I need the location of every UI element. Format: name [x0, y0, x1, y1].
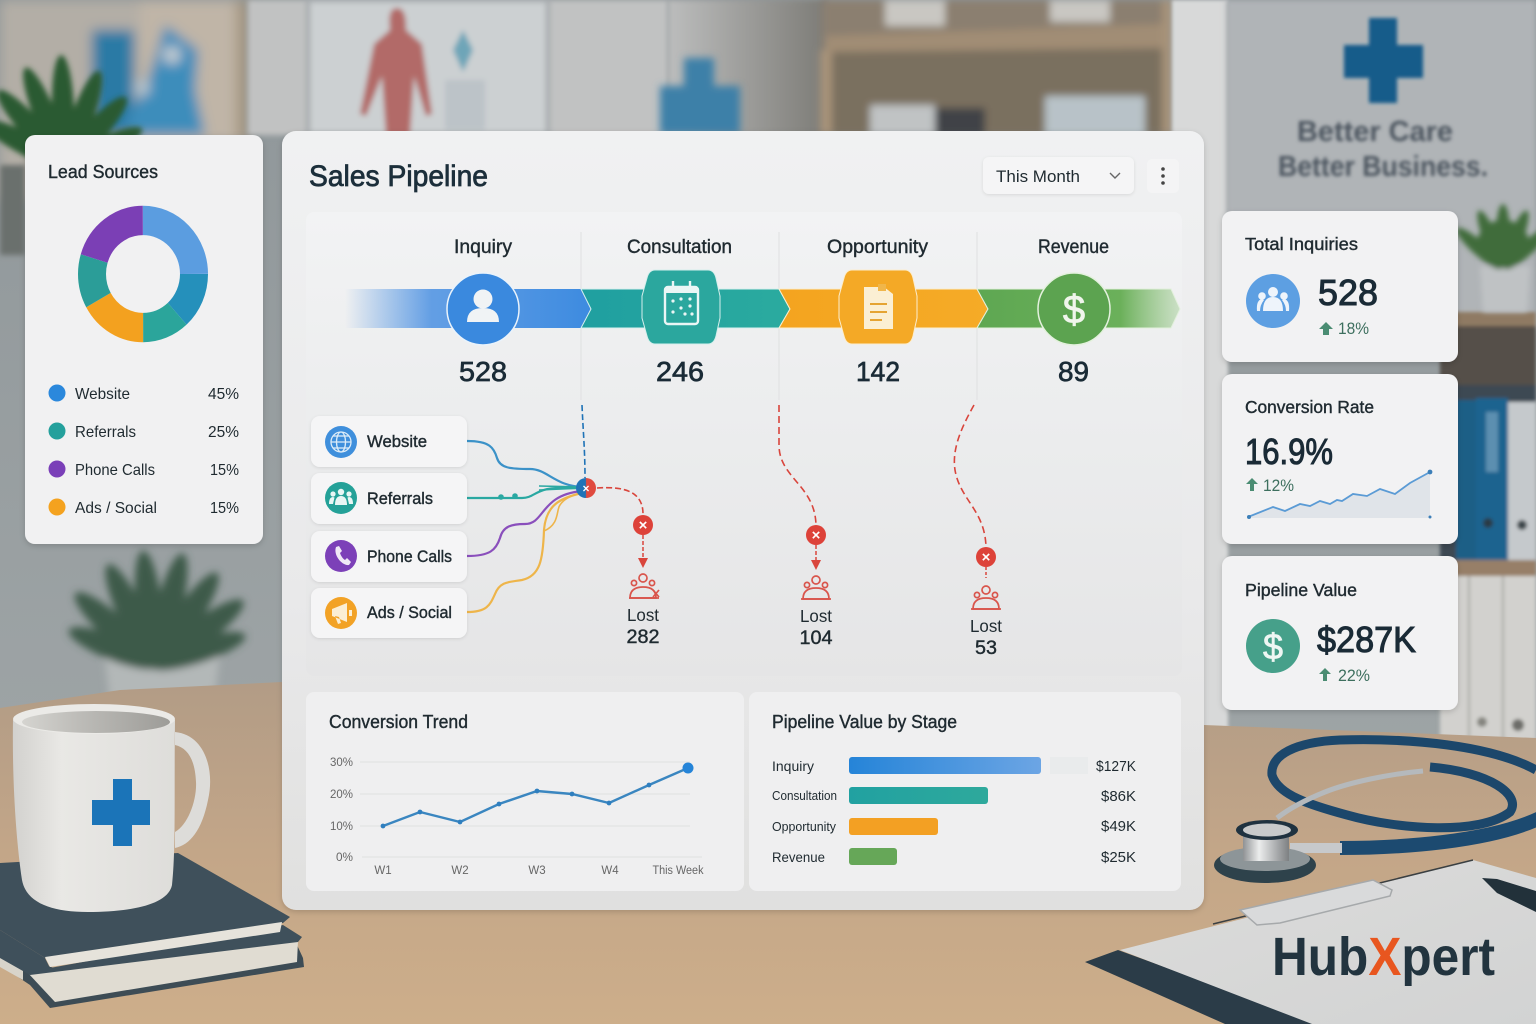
lost branch two: ×: [812, 527, 821, 544]
stage counts: 89: [1058, 356, 1089, 387]
bar: revenue: $25K: [1101, 849, 1136, 866]
lost branch one: Lost: [627, 605, 659, 625]
clipboard and paper: [1085, 860, 1536, 1024]
bar: inquiry: [772, 757, 1136, 775]
bar: revenue: [772, 848, 1136, 866]
trend up 12%: [1246, 476, 1294, 495]
card: total inquiries: 528: [1318, 272, 1378, 313]
sign text: [1278, 116, 1488, 183]
line chart: W3: [528, 865, 546, 877]
line chart: [330, 757, 704, 877]
stage labels: Consultation: [627, 237, 732, 258]
dropdown: this month: This Month: [996, 167, 1080, 186]
card: pipeline value: $287K: [1317, 619, 1416, 660]
icon: lost people: [629, 574, 659, 598]
source: website: [311, 416, 467, 467]
desk: [0, 682, 1536, 1024]
stage labels: Inquiry: [454, 237, 513, 258]
source: referrals: Referrals: [367, 489, 433, 508]
bar: opportunity: [772, 818, 1136, 835]
icon: dollar: [1246, 619, 1300, 673]
legend: 45%: [208, 386, 239, 403]
card: pipeline value: [1222, 556, 1458, 710]
stage counts: 528: [459, 356, 507, 387]
panel: pipeline value by stage: Pipeline Value by Stage: [772, 712, 957, 732]
icon: dollar: $: [1263, 626, 1283, 667]
sign text: Better Care: [1297, 116, 1453, 148]
icon: opportunity clipboard: [839, 270, 917, 344]
trend up 18%: 18%: [1338, 319, 1369, 338]
panel: lead sources: [25, 135, 263, 544]
source: phone calls: [311, 531, 467, 582]
sign text: Better Business.: [1278, 151, 1488, 183]
bar: inquiry: $127K: [1096, 758, 1136, 775]
bar: consultation: $86K: [1101, 788, 1136, 805]
icon: inquiry person: [447, 273, 519, 345]
stage labels: Revenue: [1038, 237, 1109, 258]
notebooks: [0, 853, 304, 1008]
trend up 18%: [1319, 319, 1369, 338]
panel: lead sources: Lead Sources: [48, 162, 158, 182]
logo: HubXpert: HubXpert: [1272, 927, 1495, 987]
blue dashed inquiry drop: [582, 405, 585, 478]
mug cross: [92, 779, 150, 846]
hub node: ×: [582, 482, 590, 496]
light wall and anatomy poster: [248, 0, 668, 136]
wall poster with blue artwork: [0, 0, 248, 200]
right plant: [1452, 204, 1536, 312]
lost branch one: [597, 488, 660, 648]
icon: lost people: [801, 576, 831, 599]
wall blue cross: [660, 58, 740, 134]
lost branch two: Lost: [800, 606, 832, 626]
card: pipeline value: Pipeline Value: [1245, 580, 1357, 600]
lost branch three: 53: [975, 638, 997, 659]
menu button: [1147, 159, 1179, 193]
source: ads and social: [311, 588, 467, 638]
trend up 22%: 22%: [1338, 666, 1370, 685]
hub node: [576, 478, 596, 498]
source flow lines: [467, 441, 585, 612]
source: ads and social: Ads / Social: [367, 603, 452, 622]
bookshelf: [820, 0, 1172, 136]
source: referrals: [311, 473, 467, 524]
stage counts: [459, 356, 1089, 387]
card: conversion rate: 16.9%: [1245, 431, 1333, 472]
stage counts: 246: [656, 356, 704, 387]
lost branch one: 282: [626, 627, 660, 648]
icon: revenue dollar: $: [1063, 288, 1085, 332]
legend: [48, 384, 239, 517]
white column: [1172, 0, 1228, 740]
donut chart: [92, 220, 194, 328]
legend: Referrals: [75, 424, 136, 441]
right shelves and binders: [1440, 312, 1536, 741]
lower left plant: [64, 549, 251, 702]
bar: opportunity: Opportunity: [772, 820, 837, 834]
card: total inquiries: [1222, 211, 1458, 362]
lost branch two: [779, 405, 833, 649]
line chart: W1: [374, 865, 392, 877]
heading: sales pipeline: Sales Pipeline: [309, 160, 488, 193]
stage labels: [454, 237, 1109, 258]
lost branch three: [954, 405, 1002, 659]
mug: [13, 704, 210, 912]
line chart: 30%: [330, 757, 353, 769]
stage labels: Opportunity: [827, 237, 928, 258]
legend: 15%: [210, 462, 239, 479]
line chart: W2: [451, 865, 469, 877]
sparkline: [1247, 470, 1432, 519]
card: conversion rate: Conversion Rate: [1245, 397, 1374, 417]
icon: consultation calendar: [642, 270, 720, 344]
right wall with sign: [1226, 0, 1536, 330]
trend up 12%: 12%: [1263, 476, 1294, 495]
line chart: 0%: [336, 852, 353, 864]
line chart: This Week: [652, 865, 704, 877]
legend: 15%: [210, 500, 239, 517]
lost branch three: ×: [982, 549, 991, 566]
icon: lost people: [971, 586, 1001, 609]
stage counts: 142: [856, 356, 900, 387]
source: website: Website: [367, 432, 427, 451]
bar: inquiry: Inquiry: [772, 758, 814, 774]
panel: conversion trend: Conversion Trend: [329, 712, 468, 732]
legend: Phone Calls: [75, 462, 155, 479]
source: phone calls: Phone Calls: [367, 547, 452, 566]
panel: main sales pipeline: [282, 131, 1204, 910]
card: conversion rate: [1222, 374, 1458, 544]
trend up 22%: [1319, 666, 1370, 685]
arrow band: [345, 289, 1180, 328]
panel: conversion trend: [306, 692, 744, 891]
bar: consultation: Consultation: [772, 789, 837, 803]
legend: Ads / Social: [75, 500, 157, 517]
sign cross: [1344, 18, 1423, 103]
icon: revenue dollar: [1038, 273, 1110, 345]
lost branch one: ×: [639, 517, 648, 534]
legend: Website: [75, 386, 130, 403]
icon: people: [1246, 274, 1300, 328]
legend: 25%: [208, 424, 239, 441]
line chart: 10%: [330, 821, 353, 833]
lost branch three: Lost: [970, 616, 1002, 636]
dropdown: this month: [983, 157, 1134, 194]
panel: funnel stages: [306, 212, 1182, 676]
top left plant: [0, 55, 146, 255]
line chart: 20%: [330, 789, 353, 801]
panel: pipeline value by stage: [749, 692, 1181, 891]
shaded wall section: [668, 0, 828, 135]
bar: revenue: Revenue: [772, 849, 825, 865]
card: total inquiries: Total Inquiries: [1245, 234, 1358, 254]
line chart: W4: [601, 865, 619, 877]
bar: opportunity: $49K: [1101, 818, 1136, 835]
stethoscope: [1214, 740, 1536, 883]
bar: consultation: [772, 787, 1136, 805]
lost branch two: 104: [800, 628, 833, 649]
